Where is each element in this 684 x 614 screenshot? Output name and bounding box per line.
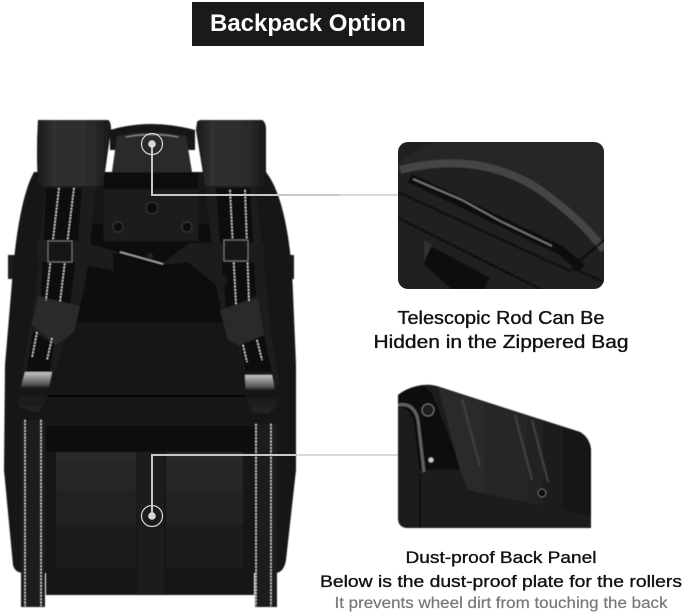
strap adjusters [48,241,72,262]
callout line: back panel [142,455,398,526]
reflective stitching [25,188,271,606]
callout line: telescopic rod [142,134,398,195]
caption: telescopic rod: Telescopic Rod Can Be [398,308,604,328]
title banner: Backpack Option [210,10,406,37]
top handle [110,124,195,150]
main body [4,172,296,573]
bottom roller panel [46,452,254,595]
lower strap webbing [21,420,45,607]
caption: telescopic rod: Hidden in the Zippered Bag [374,332,628,352]
side webbing loops [8,255,16,279]
detail photo: dust-proof back panel [398,385,591,528]
chest strap [37,240,120,272]
chest buckle [113,253,163,284]
right shoulder strap [205,186,280,385]
title banner [192,2,424,46]
left metal buckle [18,372,52,413]
caption: dust-proof back panel: It prevents wheel dirt from touching the back [334,595,668,612]
right metal buckle [245,375,278,414]
backpack photo [4,120,296,607]
caption: dust-proof back panel: Dust-proof Back Panel [406,548,596,567]
caption: telescopic rod [374,308,628,352]
back panel upper [46,172,254,452]
rivets [146,202,158,214]
caption: dust-proof back panel: Below is the dust-proof plate for the rollers [320,572,682,591]
detail photo: zippered bag [398,142,604,289]
caption: dust-proof back panel [320,548,682,612]
left shoulder strap [20,186,96,385]
